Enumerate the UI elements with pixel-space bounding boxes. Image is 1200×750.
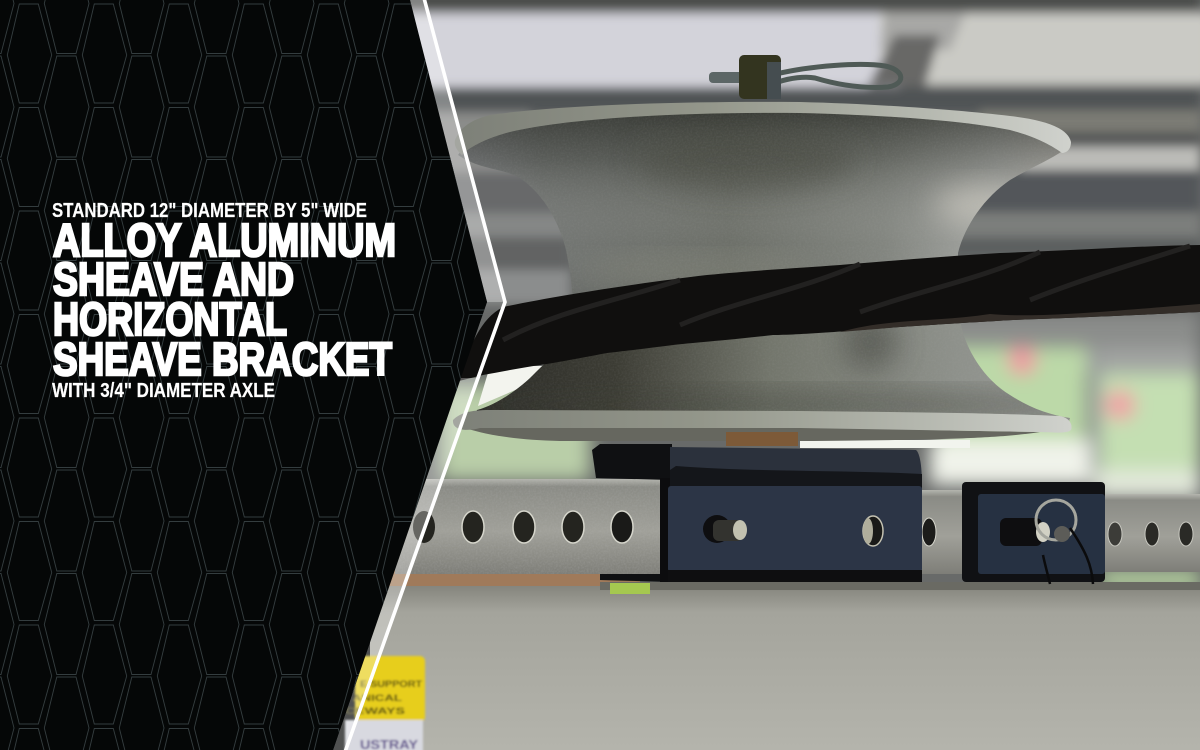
yellow warning label: E SUPPORT bbox=[360, 679, 422, 690]
pin on main bracket bbox=[703, 515, 747, 543]
orange strip below strut bbox=[389, 570, 640, 586]
secondary bracket with clip ring bbox=[962, 482, 1105, 584]
eyebrow text: STANDARD 12" DIAMETER BY 5" WIDE bbox=[52, 200, 367, 222]
title: ALLOY ALUMINUM bbox=[53, 214, 396, 266]
sheave lower cone bbox=[476, 324, 1070, 421]
yellow warning label bbox=[345, 656, 425, 750]
lower grey box bbox=[370, 582, 1200, 750]
main horizontal sheave bracket bbox=[592, 444, 922, 582]
sheave lower rim bbox=[453, 410, 1072, 441]
title: SHEAVE BRACKET bbox=[53, 333, 392, 385]
twisted wire rope bbox=[455, 245, 1200, 382]
sheave axle pin bbox=[709, 55, 901, 99]
square tube strut bbox=[395, 479, 1200, 574]
text block bbox=[52, 200, 396, 402]
photo: sheave and bracket bbox=[345, 0, 1200, 750]
subtitle text: WITH 3/4" DIAMETER AXLE bbox=[52, 380, 275, 402]
title: SHEAVE AND bbox=[53, 253, 294, 305]
yellow warning label: CEWAYS bbox=[345, 706, 405, 717]
title: HORIZONTAL bbox=[53, 293, 287, 345]
sheave upper rim bbox=[455, 102, 1071, 155]
blurred ceiling background bbox=[410, 0, 1200, 582]
copper axle bbox=[726, 432, 798, 446]
translucent sliver between panel and chevron: upper bbox=[410, 0, 505, 302]
title bbox=[53, 214, 396, 385]
white chevron line bbox=[345, 0, 505, 750]
yellow warning label: ANICAL bbox=[352, 693, 402, 704]
translucent sliver between panel and chevron: lower bbox=[333, 378, 478, 750]
sheave upper cone bbox=[458, 112, 1061, 294]
panel: black hexagon pattern bbox=[0, 0, 487, 750]
